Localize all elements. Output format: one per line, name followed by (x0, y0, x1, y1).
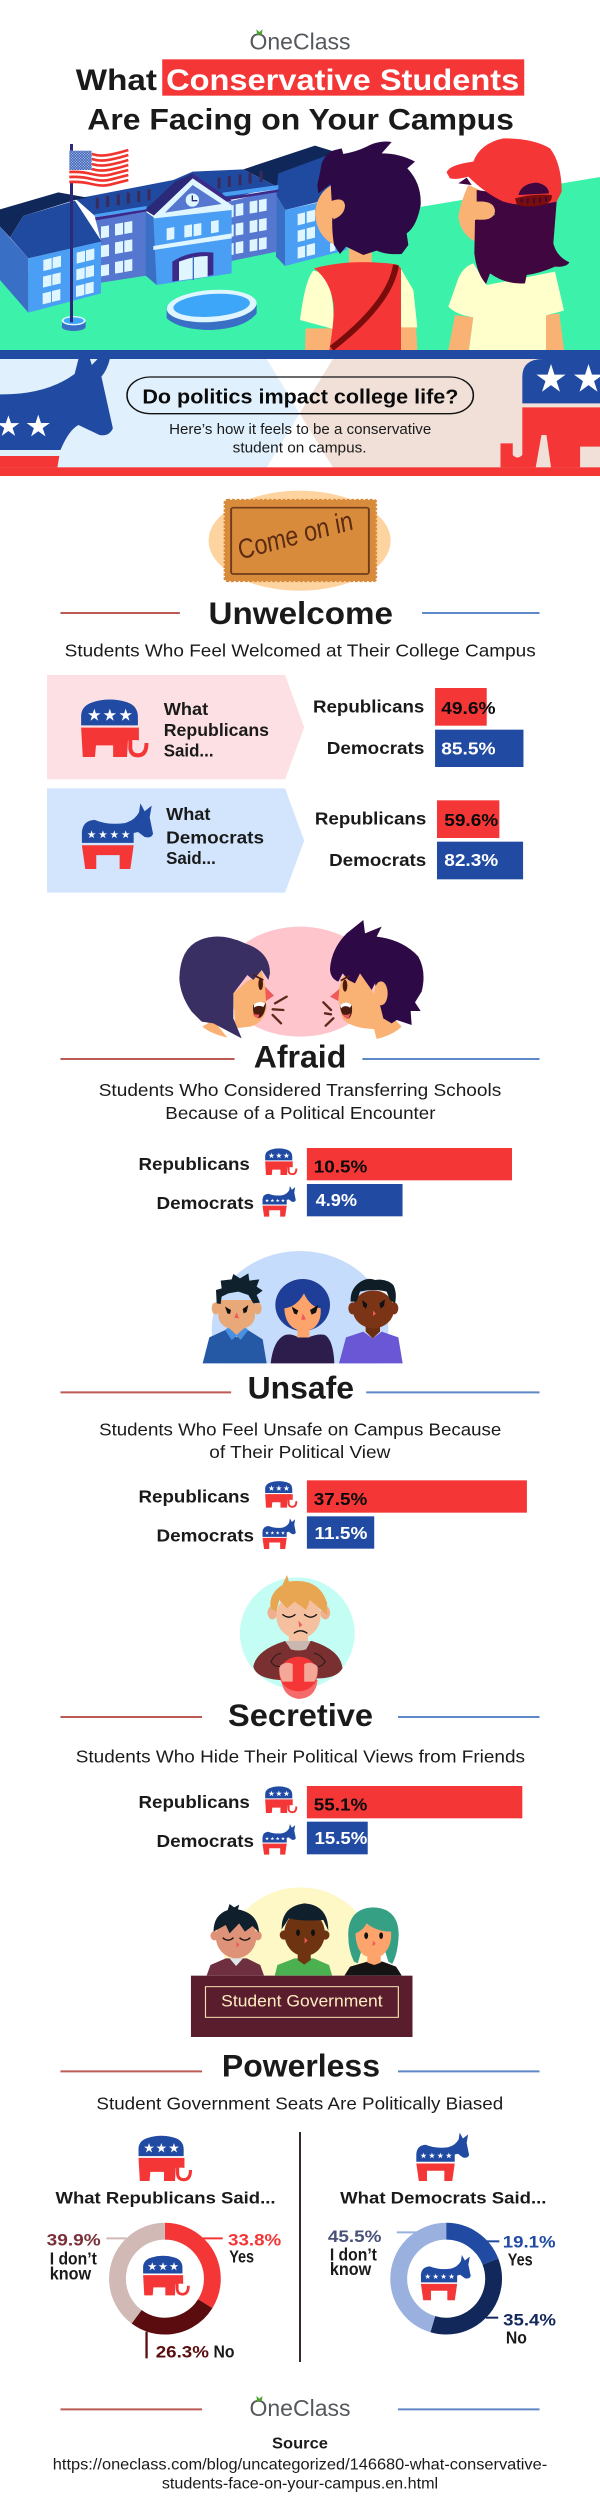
question pill (127, 377, 473, 414)
donut: democrats: 45.5% (328, 2227, 382, 2246)
lawn (0, 177, 600, 350)
donut: republicans: I don’t (50, 2249, 97, 2268)
subheading: Students Who Hide Their Political Views from Friends (76, 1747, 525, 1767)
donut: democrats: I don’t (330, 2245, 377, 2264)
panel: what republicans said: What (164, 699, 208, 719)
icon: doormat: Come on in (233, 506, 357, 566)
source url (53, 2456, 547, 2492)
footer logo (60, 2396, 540, 2422)
source url: students-face-on-your-campus.en.html (162, 2476, 438, 2492)
subheading: Students Who Feel Welcomed at Their College Campus (65, 641, 536, 661)
panel: what democrats said: Said... (166, 848, 216, 868)
panel: what republicans said: Republicans (164, 720, 269, 740)
icon: elephant (139, 2136, 190, 2181)
donut: democrats: 19.1% (503, 2232, 556, 2251)
label: what democrats said: What Democrats Said... (340, 2188, 546, 2207)
subheading: Student Government Seats Are Politically Biased (96, 2094, 503, 2114)
campus scene illustration (0, 138, 600, 350)
subheading (99, 1080, 501, 1124)
bar chart: transferring (139, 1148, 512, 1217)
bar chart: republicans said: 49.6% (441, 698, 496, 719)
building (0, 146, 347, 313)
panel: what republicans said: Said... (164, 741, 214, 760)
heading: Secretive (228, 1698, 373, 1733)
bar chart: democrats said: 59.6% (444, 810, 498, 831)
flag and pole (62, 144, 128, 331)
divider (299, 2132, 301, 2362)
icon: three angry students (202, 1251, 403, 1364)
donut: republicans: Yes (229, 2247, 254, 2266)
source url: https://oneclass.com/blog/uncategorized/146680-what-conservative- (53, 2456, 547, 2473)
panel: what democrats said: Democrats (166, 828, 264, 847)
icon: student government podium (191, 1887, 412, 2041)
section: Powerless (55, 1887, 546, 2207)
donut charts (47, 2227, 556, 2492)
title line 2: Are Facing on Your Campus (87, 102, 514, 136)
bar chart: democrats said: Republicans (315, 809, 426, 828)
bar chart: republicans said: Republicans (313, 697, 424, 716)
bar chart: unsafe: Republicans (139, 1487, 250, 1506)
bar chart: hiding views: Democrats (157, 1831, 254, 1851)
icon: doormat (209, 491, 391, 591)
banner background left (0, 359, 300, 467)
title highlighted words: Conservative Students (166, 63, 519, 97)
title highlight box (162, 59, 524, 96)
footer logo: OneClass (249, 2396, 351, 2422)
large elephant (501, 359, 600, 467)
bar chart: democrats said: Democrats (329, 850, 426, 870)
bar chart: hiding views: 55.1% (314, 1795, 367, 1815)
student with vest (300, 142, 421, 350)
panel: what democrats said: What (166, 804, 210, 824)
bar chart: republicans said: 85.5% (441, 739, 496, 759)
subheading: Students Who Feel Unsafe on Campus Because (99, 1420, 501, 1440)
source heading: Source (272, 2435, 328, 2452)
donut: republicans: know (50, 2264, 92, 2283)
bar chart: unsafe: 37.5% (314, 1489, 367, 1510)
bar chart: transferring: 10.5% (314, 1157, 367, 1177)
intro text: student on campus. (233, 440, 367, 456)
heading: Powerless (222, 2049, 380, 2084)
bar chart: republicans said: Democrats (327, 738, 424, 758)
bar chart: transferring: 4.9% (316, 1190, 357, 1211)
heading: Unsafe (248, 1370, 354, 1406)
heading: Afraid (254, 1040, 346, 1075)
donut: republicans: 26.3% (156, 2342, 209, 2361)
subheading: of Their Political View (209, 1442, 391, 1463)
bar chart: republicans said (313, 688, 523, 767)
intro text: Here’s how it feels to be a conservative (169, 422, 431, 438)
section: Secretive (60, 1575, 540, 1855)
bar chart: democrats said: 82.3% (444, 850, 498, 871)
donut: democrats: know (330, 2259, 372, 2279)
intro banner (0, 350, 600, 476)
large donkey (0, 359, 113, 467)
subheading (99, 1420, 501, 1463)
donut: democrats: Yes (508, 2250, 533, 2269)
subheading: Because of a Political Encounter (165, 1103, 436, 1124)
heading: Unwelcome (209, 596, 393, 631)
section: Unsafe (60, 1370, 540, 1549)
section: Unwelcome (47, 491, 540, 893)
bar chart: unsafe (139, 1480, 527, 1549)
bar chart: unsafe: Democrats (157, 1526, 254, 1545)
panel: what democrats said (47, 788, 304, 893)
title line 1: What (76, 63, 157, 97)
subheading: Students Who Considered Transferring Schools (99, 1080, 501, 1101)
bar chart: unsafe: 11.5% (315, 1523, 367, 1544)
bar chart: hiding views (139, 1786, 522, 1855)
intro text (169, 422, 431, 456)
donut: republicans (47, 2230, 281, 2361)
banner top band (0, 350, 600, 359)
donut: republicans: No (214, 2342, 235, 2361)
donut: democrats: No (506, 2328, 527, 2347)
bar chart: hiding views: 15.5% (315, 1828, 367, 1849)
banner background right (300, 359, 600, 467)
bar chart: transferring: Democrats (157, 1193, 254, 1213)
student with red cap (447, 138, 569, 350)
icon: student government podium: Student Government (221, 1992, 383, 2010)
panel: what republicans said (47, 675, 304, 779)
donut: republicans: 39.9% (47, 2230, 101, 2249)
bar chart: transferring: Republicans (139, 1154, 250, 1174)
label: what republicans said: What Republicans Said... (55, 2188, 276, 2207)
donut: republicans: 33.8% (228, 2230, 281, 2249)
icon: student hiding cap (240, 1575, 355, 1699)
banner red strip (0, 467, 600, 476)
icon: donkey (416, 2133, 469, 2181)
header: logo and title (76, 29, 524, 136)
donut: democrats (328, 2227, 556, 2347)
question text: Do politics impact college life? (142, 385, 458, 408)
section: Afraid (60, 1040, 540, 1217)
bar chart: democrats said (315, 800, 523, 879)
logo: OneClass: OneClass (249, 29, 351, 55)
donut: democrats: 35.4% (503, 2310, 556, 2329)
icon: arguing students (179, 920, 424, 1039)
bar chart: hiding views: Republicans (139, 1792, 250, 1812)
fountain (166, 287, 258, 330)
